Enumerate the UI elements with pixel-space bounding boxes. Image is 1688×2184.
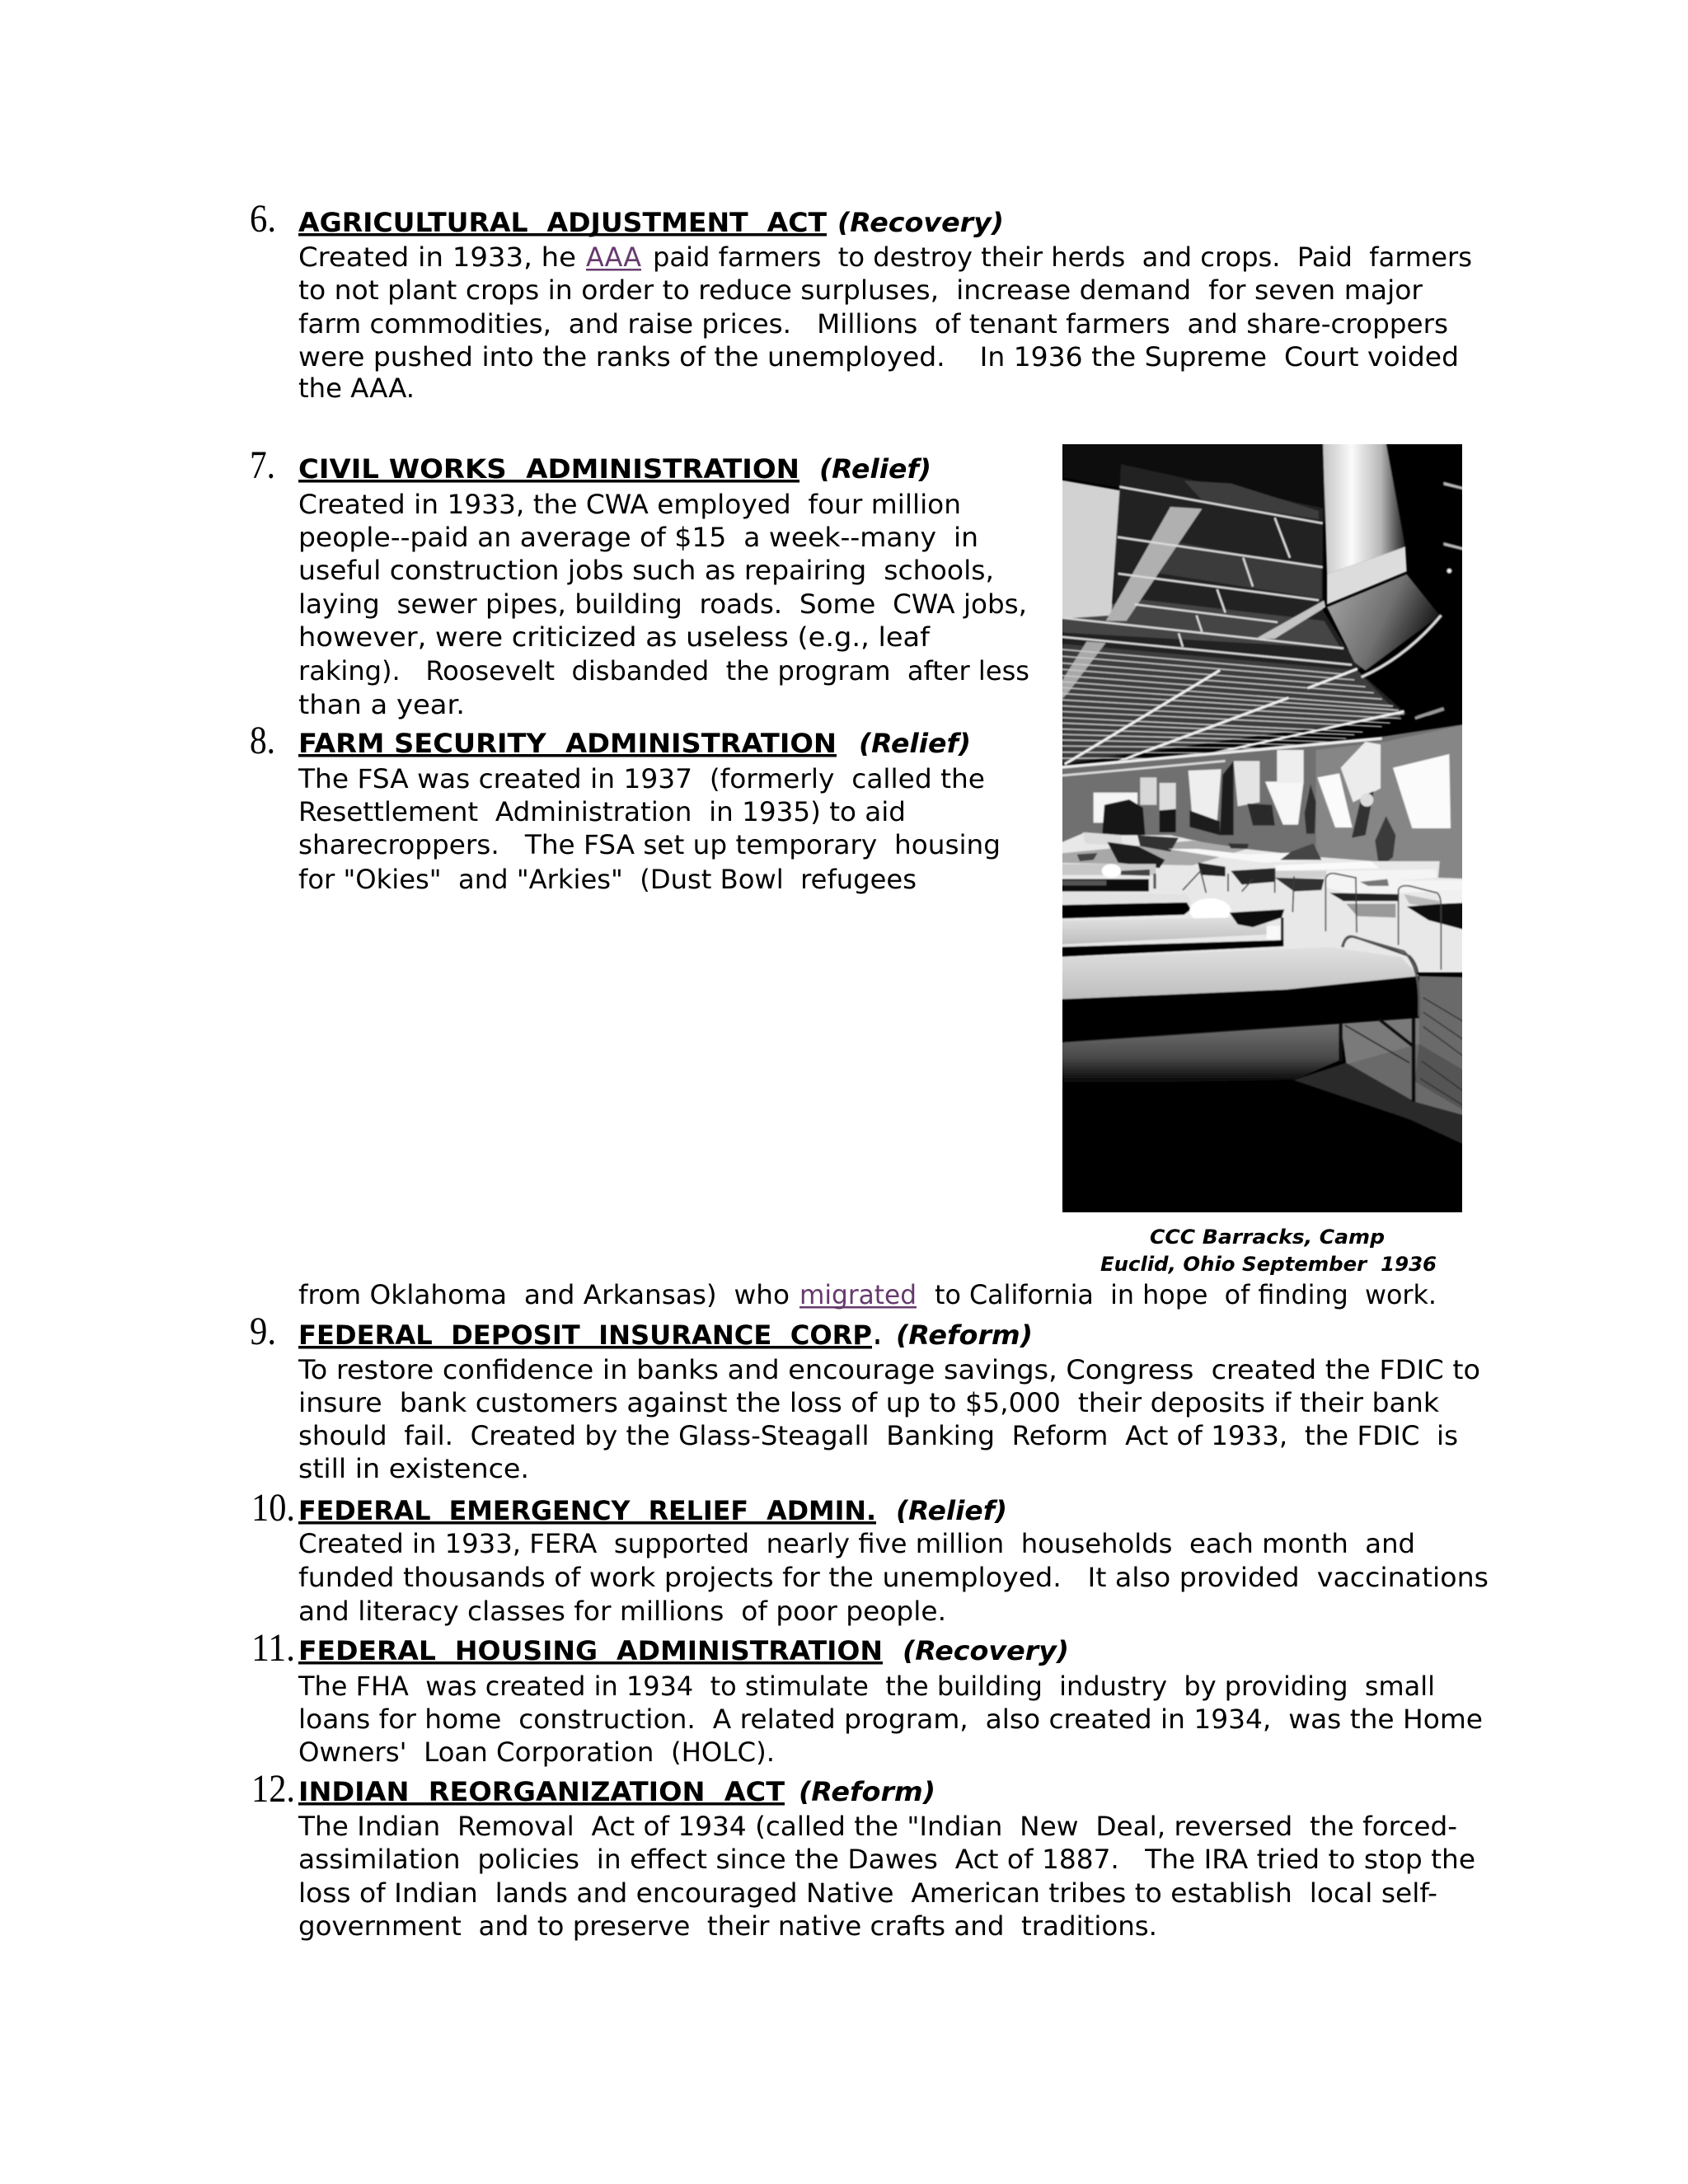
- body text: loss of Indian lands and encouraged Native American tribes to establish local self-: [298, 1877, 1437, 1909]
- middle photo in zoom coordinates: [1049, 723, 1475, 972]
- heading: Agricultural Adjustment Act: AGRICULTURAL ADJUSTMENT ACT: [298, 207, 827, 238]
- lower photo in zoom coordinates: [1062, 935, 1462, 1144]
- body text: were pushed into the ranks of the unemployed. In 1936 the Supreme Court voided: [298, 341, 1459, 373]
- body text: To restore confidence in banks and encourage savings, Congress created the FDIC to: [298, 1354, 1480, 1385]
- body text: loans for home construction. A related program, also created in 1934, was the Home: [298, 1704, 1483, 1735]
- body text: and literacy classes for millions of poor people.: [298, 1596, 946, 1627]
- body text: to not plant crops in order to reduce surpluses, increase demand for seven major: [298, 274, 1423, 306]
- number 11: 11.: [251, 1626, 295, 1670]
- photo caption: [1100, 1226, 1437, 1276]
- body text: Resettlement Administration in 1935) to aid: [298, 796, 906, 827]
- body text: [298, 1671, 1483, 1768]
- number 12: 12.: [251, 1767, 295, 1811]
- body text: government and to preserve their native crafts and traditions.: [298, 1910, 1157, 1942]
- body text: people--paid an average of $15 a week--many in: [298, 522, 978, 553]
- body text: useful construction jobs such as repairing schools,: [298, 555, 994, 586]
- body text: The FSA was created in 1937 (formerly called the: [298, 763, 985, 794]
- heading: Federal Deposit Insurance Corp.: (Reform): [896, 1319, 1033, 1351]
- body text: [298, 1354, 1480, 1484]
- section 6: Agricultural Adjustment Act: [250, 197, 1472, 404]
- body text: Created in 1933, FERA supported nearly five million households each month and: [298, 1528, 1415, 1559]
- body text: from Oklahoma and Arkansas) who: [298, 1279, 790, 1310]
- heading: Federal Deposit Insurance Corp.: .: [874, 1319, 881, 1351]
- section 9: Federal Deposit Insurance Corp.: [250, 1310, 1480, 1484]
- body text: Created in 1933, he: [298, 241, 576, 273]
- number 10: 10.: [251, 1486, 295, 1530]
- section 10: Federal Emergency Relief Admin.: [251, 1486, 1489, 1627]
- body text: [298, 1811, 1475, 1942]
- number 6: 6.: [250, 197, 276, 241]
- section 7: Civil Works Administration: [250, 443, 1029, 720]
- body text: AAA: [586, 241, 641, 273]
- body text: assimilation policies in effect since the Dawes Act of 1887. The IRA tried to stop the: [298, 1844, 1475, 1875]
- body text: than a year.: [298, 689, 465, 720]
- body text: to California in hope of finding work.: [935, 1279, 1437, 1310]
- number 9: 9.: [250, 1310, 276, 1353]
- body text: insure bank customers against the loss of up to $5,000 their deposits if their bank: [298, 1387, 1439, 1418]
- heading: Federal Emergency Relief Admin.: FEDERAL EMERGENCY RELIEF ADMIN.: [298, 1495, 876, 1526]
- body text: [298, 763, 1437, 1310]
- photo: CCC barracks interior: [1049, 439, 1478, 1229]
- body text: migrated: [799, 1279, 917, 1310]
- body text: should fail. Created by the Glass-Steagall Banking Reform Act of 1933, the FDIC is: [298, 1420, 1458, 1451]
- heading: Federal Deposit Insurance Corp.: FEDERAL DEPOSIT INSURANCE CORP: [298, 1319, 872, 1351]
- section 11: Federal Housing Administration: [251, 1626, 1483, 1768]
- body text: farm commodities, and raise prices. Millions of tenant farmers and share-croppers: [298, 308, 1448, 340]
- heading: Civil Works Administration: (Relief): [819, 453, 931, 485]
- heading: Indian Reorganization Act: INDIAN REORGANIZATION ACT: [298, 1776, 785, 1807]
- heading: Federal Housing Administration: FEDERAL HOUSING ADMINISTRATION: [298, 1635, 883, 1666]
- body text: the AAA.: [298, 373, 415, 404]
- body text: for "Okies" and "Arkies" (Dust Bowl refugees: [298, 864, 917, 895]
- heading: Civil Works Administration: CIVIL WORKS ADMINISTRATION: [298, 453, 799, 485]
- heading: Farm Security Administration: (Relief): [859, 728, 971, 759]
- body text: [298, 489, 1029, 720]
- body text: Created in 1933, the CWA employed four million: [298, 489, 961, 520]
- body text: [298, 241, 1472, 404]
- heading: Indian Reorganization Act: (Reform): [799, 1776, 935, 1807]
- body text: Owners' Loan Corporation (HOLC).: [298, 1736, 775, 1768]
- body text: laying sewer pipes, building roads. Some CWA jobs,: [298, 588, 1027, 620]
- body text: [298, 1528, 1489, 1627]
- upper photo in zoom coordinates: [1049, 439, 1478, 766]
- section 12: Indian Reorganization Act: [251, 1767, 1475, 1942]
- heading: Agricultural Adjustment Act: (Recovery): [837, 207, 1004, 238]
- heading: Farm Security Administration: FARM SECURITY ADMINISTRATION: [298, 728, 837, 759]
- body text: The FHA was created in 1934 to stimulate the building industry by providing small: [298, 1671, 1435, 1702]
- body text: sharecroppers. The FSA set up temporary housing: [298, 829, 1001, 860]
- heading: Federal Emergency Relief Admin.: (Relief): [896, 1495, 1007, 1526]
- photo caption: Euclid, Ohio September 1936: [1100, 1253, 1437, 1276]
- section 8: Farm Security Administration: [250, 719, 1437, 1310]
- body text: however, were criticized as useless (e.g., leaf: [298, 621, 931, 653]
- body text: The Indian Removal Act of 1934 (called the "Indian New Deal, reversed the forced-: [298, 1811, 1457, 1842]
- body text: paid farmers to destroy their herds and crops. Paid farmers: [653, 241, 1472, 273]
- photo caption: CCC Barracks, Camp: [1150, 1226, 1385, 1249]
- number 8: 8.: [250, 719, 275, 762]
- body text: funded thousands of work projects for the unemployed. It also provided vaccinations: [298, 1562, 1489, 1593]
- heading: Federal Housing Administration: (Recovery): [903, 1635, 1069, 1666]
- body text: still in existence.: [298, 1453, 529, 1484]
- number 7: 7.: [250, 443, 275, 487]
- body text: raking). Roosevelt disbanded the program after less: [298, 655, 1029, 687]
